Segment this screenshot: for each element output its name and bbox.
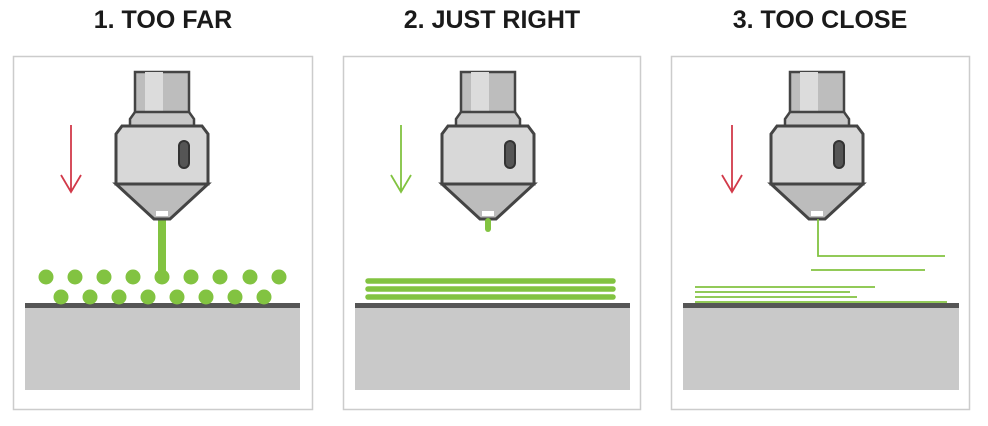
- panel 3: too close: [672, 56, 970, 410]
- panel 2: just right: [344, 56, 640, 410]
- title: just right: 2. JUST RIGHT: [404, 6, 580, 34]
- icon: green arrow: [391, 125, 411, 192]
- nozzle: [442, 72, 534, 219]
- title: too far: 1. TOO FAR: [94, 6, 232, 34]
- nozzle: [116, 72, 208, 219]
- icon: red arrow: [61, 125, 81, 192]
- title: too close: 3. TOO CLOSE: [733, 6, 907, 34]
- icon: red arrow: [722, 125, 742, 192]
- panel 1: too far: [14, 56, 312, 410]
- nozzle: [771, 72, 863, 219]
